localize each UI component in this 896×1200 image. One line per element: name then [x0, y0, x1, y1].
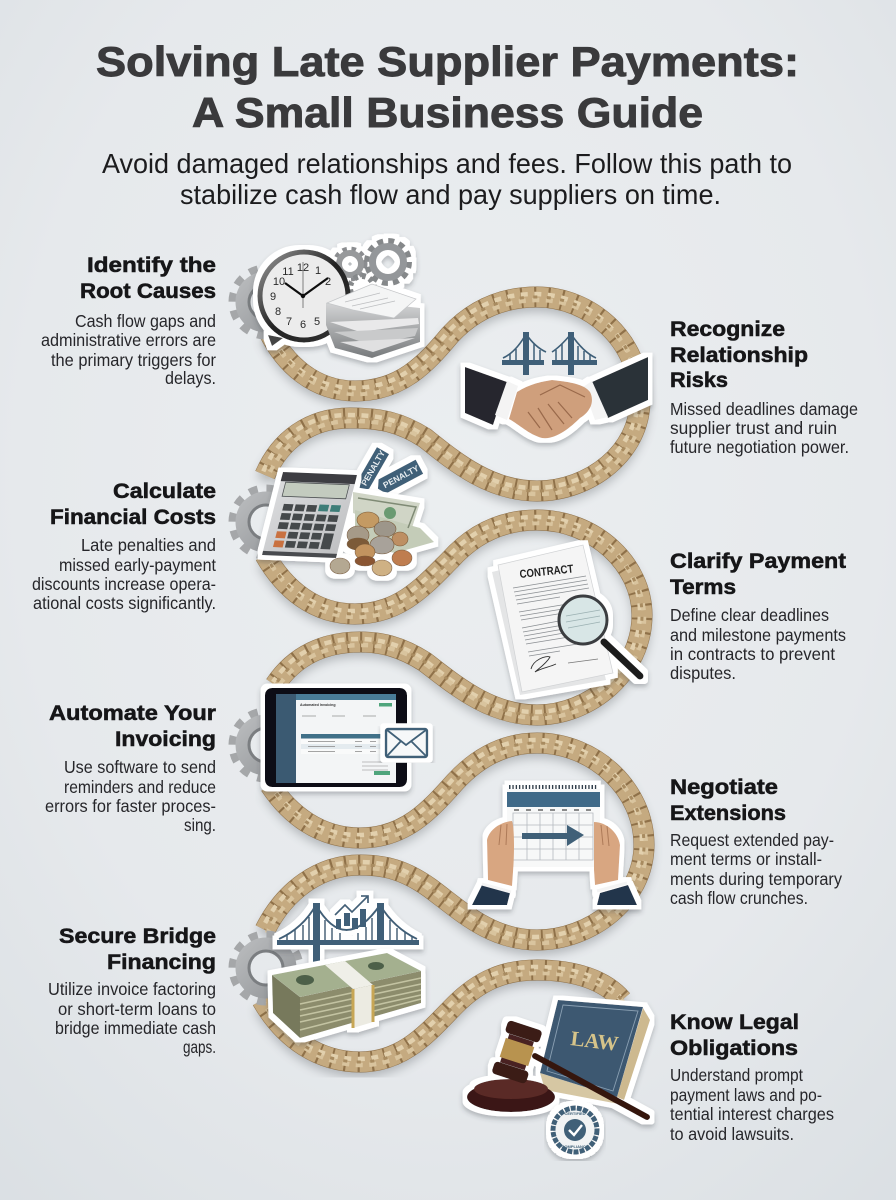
arrow on calendar [522, 825, 584, 846]
icon: gavel and law book [467, 1000, 650, 1117]
gavel [467, 1020, 647, 1117]
rope segment 2 [263, 517, 644, 721]
text block: reminders and reduce [64, 777, 216, 797]
heading: Extensions [670, 801, 786, 825]
panel: identify the root causes [41, 241, 420, 388]
text block: in contracts to prevent [670, 644, 835, 664]
icon: penalty tags: PENALTY [359, 448, 387, 487]
icon: stack of cash [272, 953, 421, 1038]
heading: Terms [670, 575, 736, 599]
heading: Negotiate [670, 775, 778, 799]
clock: 10 [273, 276, 285, 288]
panel: secure bridge financing [48, 896, 421, 1057]
text block: ational costs significantly. [33, 593, 216, 613]
heading: Obligations [670, 1036, 798, 1060]
title [96, 38, 799, 136]
clock [260, 252, 348, 346]
heading: Risks [670, 368, 728, 392]
calculator [262, 472, 357, 558]
icon: tablet [265, 688, 407, 787]
text block [670, 1065, 834, 1144]
icon: penalty tags [354, 447, 423, 496]
heading: Relationship [670, 343, 808, 367]
banknotes [353, 492, 434, 553]
text block: Cash flow gaps and [75, 311, 216, 331]
text block [48, 979, 216, 1057]
icon: certified seal [553, 1108, 597, 1152]
icon: gear [233, 489, 299, 555]
panel: negotiate extensions [472, 775, 842, 908]
heading: Automate Your [49, 701, 217, 725]
law book: LAW [569, 1026, 620, 1056]
heading: Invoicing [115, 727, 216, 751]
icon: contract with magnifier: CONTRACT [519, 563, 574, 581]
panel: automate your invoicing [45, 688, 427, 835]
icon: gear [233, 935, 299, 1001]
contract text lines [513, 576, 593, 656]
text block: Understand prompt [670, 1065, 803, 1085]
left hand [472, 821, 514, 905]
heading [49, 701, 217, 751]
text block: ment terms or install- [670, 849, 822, 869]
text block [670, 399, 858, 457]
text block: gaps. [183, 1037, 216, 1057]
text block [32, 535, 216, 613]
text block: future negotiation power. [670, 437, 849, 457]
heading [670, 1010, 799, 1060]
icon: calculator with cash and coins [262, 472, 434, 576]
rope segment 4 [260, 967, 624, 1068]
icon: tablet: Automated Invoicing [300, 703, 336, 707]
panel: clarify payment terms [492, 545, 846, 695]
heading [80, 253, 216, 303]
clock: 9 [270, 291, 276, 303]
text block [670, 605, 846, 683]
subtitle: stabilize cash flow and pay suppliers on time. [180, 179, 721, 210]
papers [326, 284, 420, 358]
heading [670, 549, 846, 599]
icon: certified seal: COMPLIANCE [562, 1144, 589, 1149]
panel: know legal obligations [467, 1000, 834, 1152]
text block: Late penalties and [81, 535, 216, 555]
heading: Secure Bridge [59, 924, 216, 948]
text block [45, 757, 216, 835]
text block: disputes. [670, 663, 736, 683]
clock: 7 [286, 316, 292, 328]
text block: to avoid lawsuits. [670, 1124, 794, 1144]
text block: Use software to send [64, 757, 216, 777]
icon: broken bridge [502, 332, 597, 375]
calendar [507, 787, 600, 867]
title: Solving Late Supplier Payments: [96, 38, 799, 85]
heading: Financing [107, 950, 216, 974]
text block: payment laws and po- [670, 1085, 822, 1105]
coins [330, 512, 412, 576]
small gears [335, 241, 409, 300]
text block: errors for faster proces- [45, 796, 216, 816]
icon: envelope [386, 729, 427, 757]
text block: and milestone payments [670, 625, 846, 645]
text block: sing. [184, 815, 216, 835]
text block: Utilize invoice factoring [48, 979, 216, 999]
text block: tential interest charges [670, 1104, 834, 1124]
text block: ments during temporary [670, 869, 842, 889]
title: A Small Business Guide [192, 89, 703, 136]
heading: Financial Costs [50, 505, 216, 529]
clock: 6 [300, 319, 306, 331]
text block: Define clear deadlines [670, 605, 829, 625]
icon: calendar with hands [472, 787, 637, 905]
law book [540, 1000, 650, 1105]
heading [670, 775, 786, 825]
icon: handshake [465, 357, 648, 438]
magnifier [559, 596, 640, 676]
heading: Recognize [670, 317, 785, 341]
text block: delays. [165, 368, 216, 388]
icon: gear [233, 269, 299, 335]
right hand [594, 822, 637, 905]
text block: bridge immediate cash [55, 1018, 216, 1038]
clock: 2 [325, 276, 331, 288]
text block: Missed deadlines damage [670, 399, 858, 419]
icon: certified seal: CERTIFIED [564, 1111, 586, 1116]
clock: 8 [275, 306, 281, 318]
rope segment 3 [263, 740, 646, 946]
icon: clock, gears and papers [260, 241, 420, 358]
heading: Clarify Payment [670, 549, 846, 573]
icon: gear [233, 712, 299, 778]
heading: Calculate [113, 479, 216, 503]
subtitle: Avoid damaged relationships and fees. Follow this path to [102, 148, 792, 179]
panel: calculate financial costs [32, 447, 434, 613]
heading: Identify the [87, 253, 216, 277]
icon: bridge with growth chart [277, 896, 419, 963]
text block: the primary triggers for [51, 350, 216, 370]
text block: or short-term loans to [58, 999, 216, 1019]
rope path connecting all steps [260, 294, 646, 1068]
clock: 12 [297, 262, 309, 274]
text block [670, 830, 842, 908]
text block: Request extended pay- [670, 830, 834, 850]
text block: discounts increase opera- [32, 574, 216, 594]
text block [41, 311, 216, 388]
text block: administrative errors are [41, 330, 216, 350]
heading: Root Causes [80, 279, 216, 303]
heading [50, 479, 216, 529]
heading [59, 924, 216, 974]
subtitle [102, 148, 792, 210]
text block: supplier trust and ruin [670, 418, 837, 438]
rope segment 1 [263, 294, 642, 497]
panel: recognize relationship risks [465, 317, 858, 457]
icon: contract with magnifier [492, 545, 640, 695]
icon: penalty tags: PENALTY [381, 463, 421, 490]
clock: 5 [314, 316, 320, 328]
heading [670, 317, 808, 392]
text block: missed early-payment [59, 555, 216, 575]
heading: Know Legal [670, 1010, 799, 1034]
text block: cash flow crunches. [670, 888, 808, 908]
clock: 1 [315, 265, 321, 277]
clock: 11 [282, 266, 294, 278]
